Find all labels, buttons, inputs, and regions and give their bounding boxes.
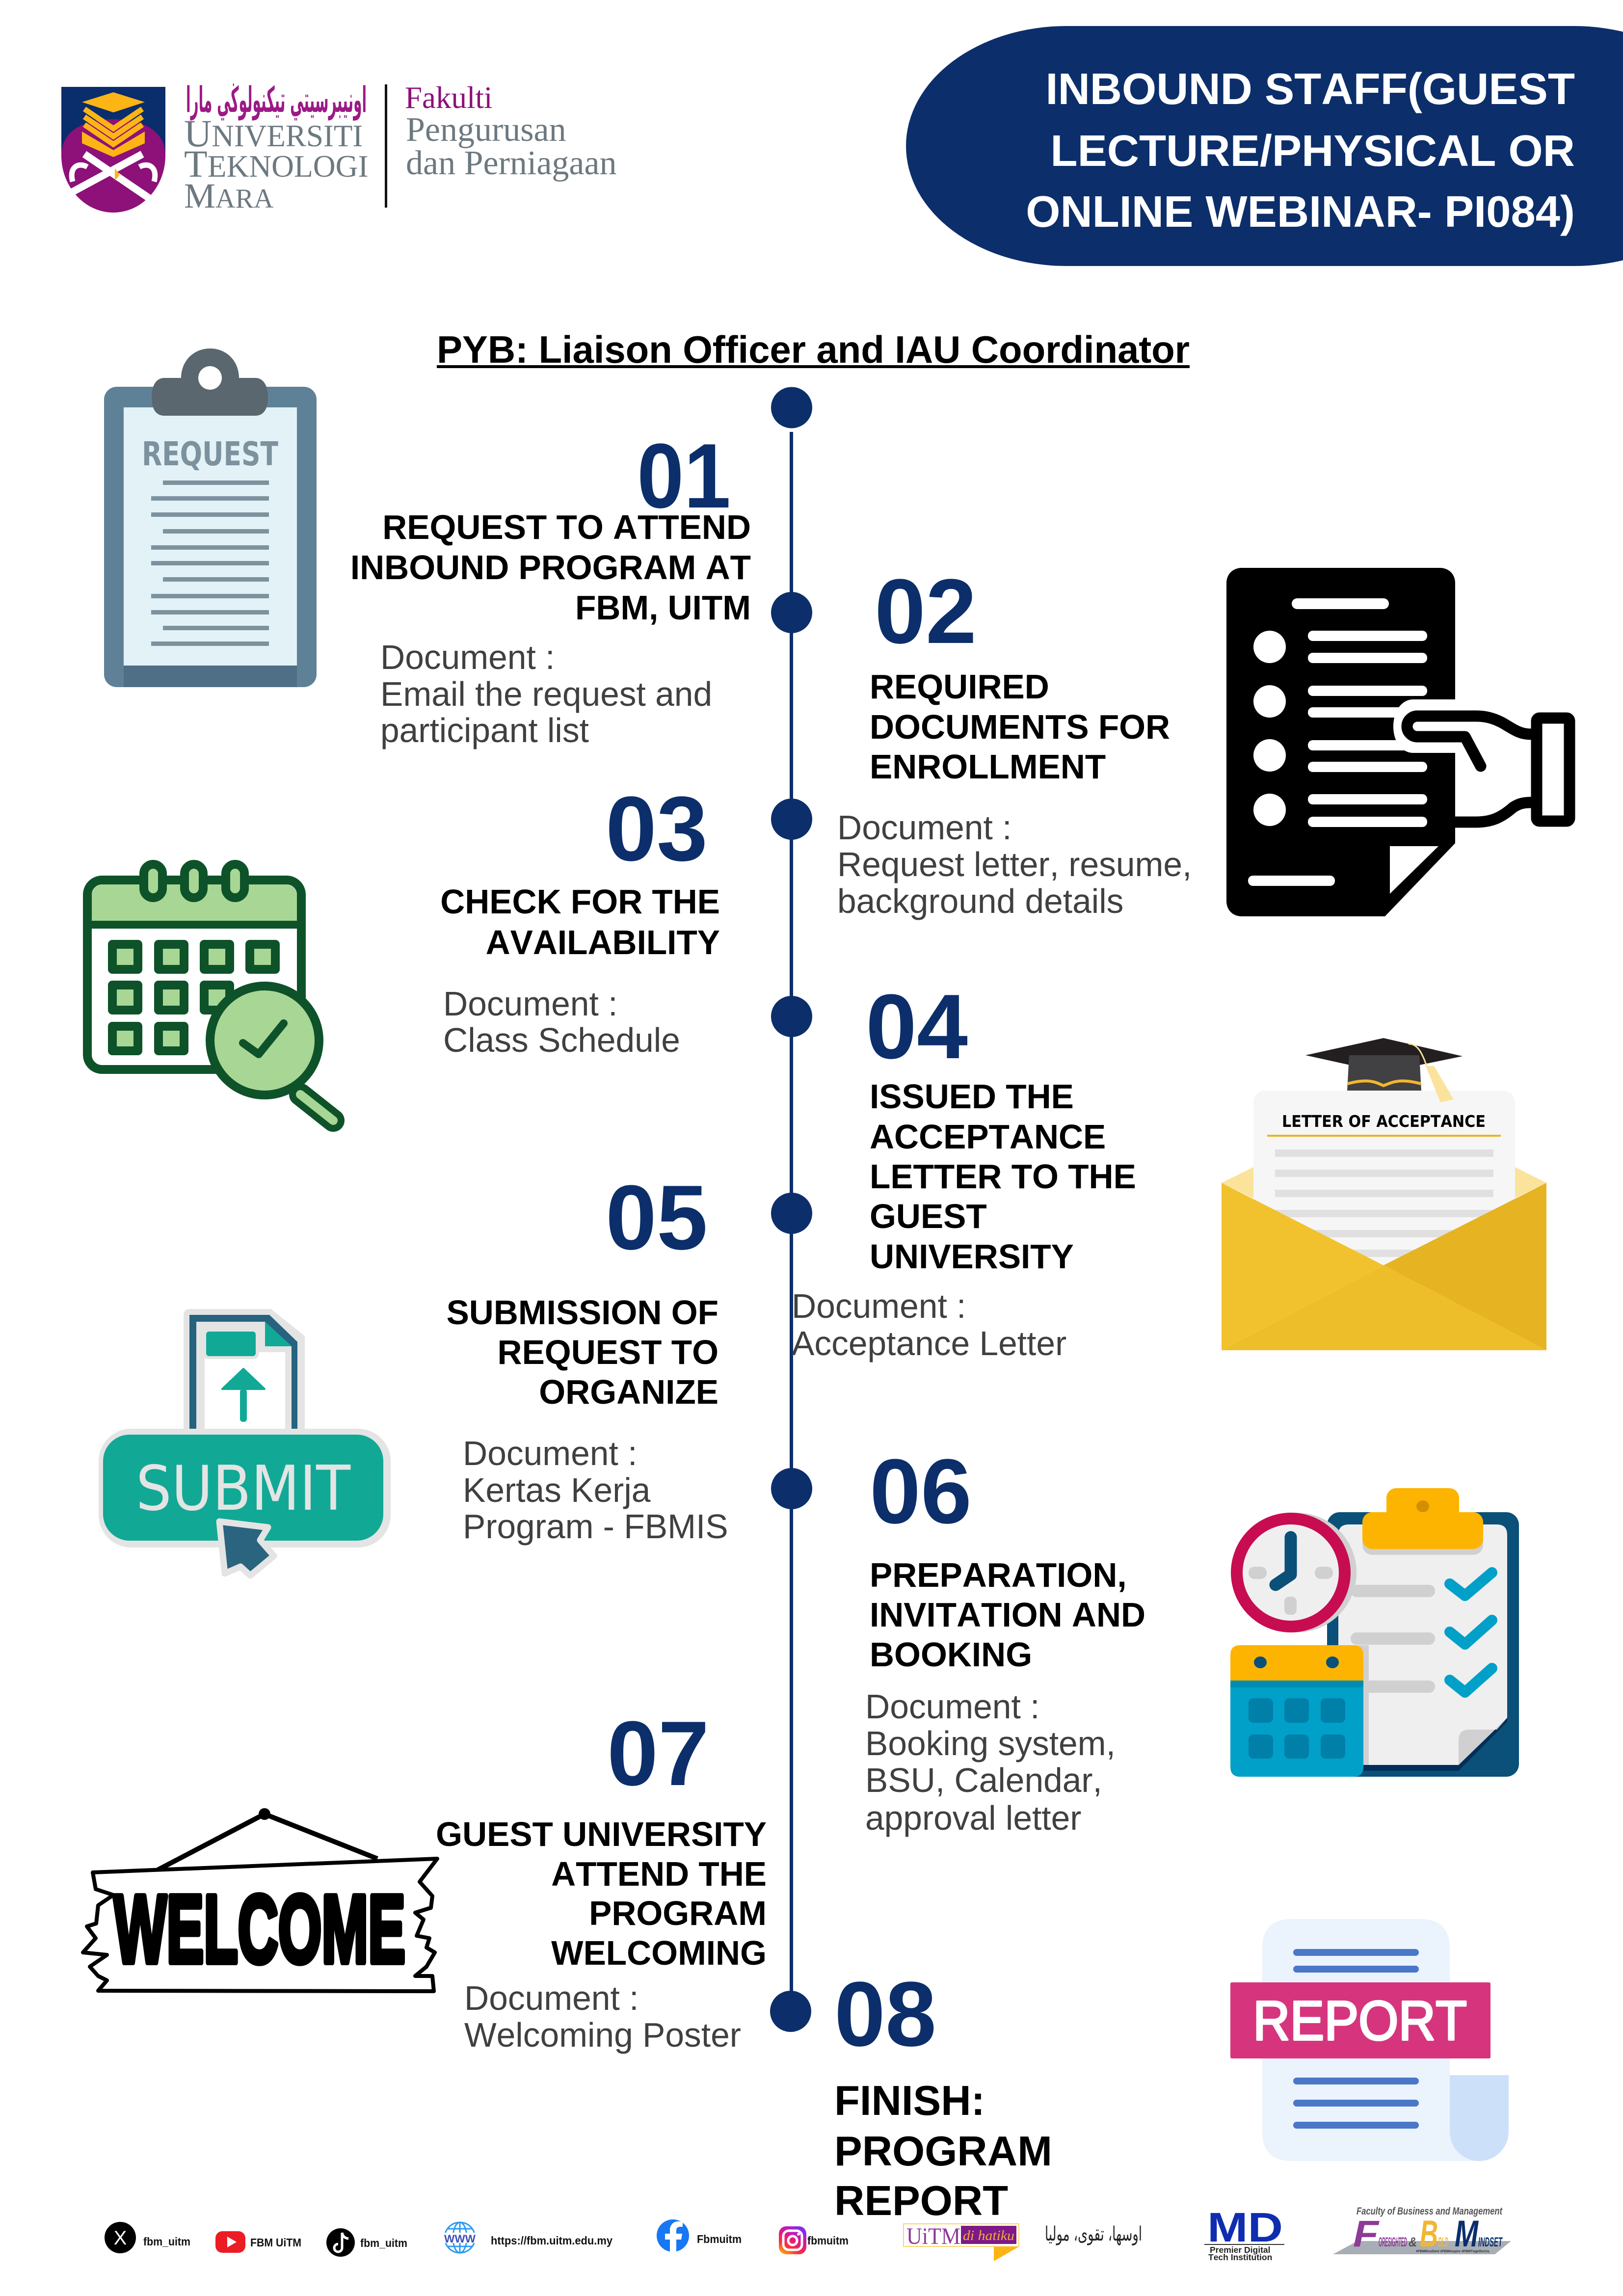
- footer: faculty tagline logo: #FBMResilient #FBMInspire #FBMTogetherUs: [1416, 2250, 1490, 2253]
- step 08 number: 08: [834, 1963, 936, 2065]
- footer: faculty tagline logo: OLD: [1438, 2235, 1448, 2249]
- logo university name: M: [184, 176, 215, 215]
- step 04 document: Acceptance Letter: [792, 1324, 1066, 1362]
- step 07 heading: ATTEND THE: [551, 1855, 767, 1893]
- icon: welcome sign: [83, 1808, 437, 1991]
- icon: checklist with clock and calendar: [1230, 1488, 1519, 1777]
- icon: request clipboard: REQUEST: [142, 435, 278, 473]
- step 01 heading: FBM, UITM: [575, 588, 751, 627]
- handle: Facebook: Fbmuitm: [697, 2233, 742, 2245]
- footer: faculty tagline logo: Faculty of Business and Management: [1357, 2206, 1503, 2217]
- step 07 document: Document :: [464, 1979, 639, 2017]
- step 01 heading: REQUEST TO ATTEND: [382, 508, 751, 546]
- step 07: [436, 1702, 767, 2054]
- step 07 heading: GUEST UNIVERSITY: [436, 1815, 767, 1853]
- step 05 document: Program - FBMIS: [463, 1507, 728, 1546]
- icon: website globe: [444, 2222, 476, 2253]
- step 02 heading: ENROLLMENT: [870, 748, 1106, 786]
- step 06: [865, 1440, 1145, 1837]
- step 05 document: Document :: [463, 1434, 637, 1472]
- step 06 heading: INVITATION AND: [870, 1596, 1145, 1634]
- step 03 heading: AVAILABILITY: [486, 923, 720, 961]
- footer: faculty tagline logo: [1333, 2206, 1511, 2255]
- graduation cap: [1305, 1038, 1463, 1091]
- step 07 heading: WELCOMING: [551, 1934, 767, 1972]
- step 08 heading: REPORT: [834, 2178, 1008, 2224]
- step 06 document: Document :: [865, 1687, 1039, 1726]
- footer: faculty tagline logo: M: [1455, 2213, 1479, 2255]
- footer: MD logo: Tech Institution: [1208, 2252, 1272, 2262]
- icon: Facebook: [657, 2219, 689, 2252]
- step 04 heading: LETTER TO THE: [870, 1157, 1136, 1196]
- step 03 heading: CHECK FOR THE: [440, 882, 720, 921]
- icon: welcome sign: WELCOME: [114, 1875, 405, 1983]
- title banner: [906, 26, 1623, 266]
- step 04 heading: UNIVERSITY: [870, 1237, 1074, 1276]
- footer: UiTM di hatiku badge: UiTM: [906, 2223, 960, 2249]
- step 03 document: Class Schedule: [443, 1021, 680, 1059]
- logo faculty name: Pengurusan: [406, 111, 566, 149]
- icon: report document: [1230, 1919, 1509, 2161]
- footer: UiTM di hatiku badge: di hatiku: [963, 2228, 1014, 2243]
- icon: report document: REPORT: [1253, 1990, 1467, 2052]
- step 05 document: Kertas Kerja: [463, 1471, 651, 1509]
- icon: TikTok: [326, 2228, 355, 2257]
- handle: YouTube: FBM UiTM: [250, 2236, 301, 2249]
- step 06 document: BSU, Calendar,: [865, 1761, 1102, 1799]
- footer: faculty tagline logo: INDSET: [1478, 2235, 1503, 2249]
- step 01 document: Email the request and: [380, 675, 712, 713]
- logo divider: [385, 84, 387, 208]
- logo university name: EKNOLOGI: [208, 149, 369, 184]
- step 04 number: 04: [866, 975, 968, 1078]
- step 03 document: Document :: [443, 985, 617, 1023]
- icon: X: [105, 2222, 136, 2253]
- step 03: [440, 777, 720, 1059]
- step 01: [350, 425, 751, 749]
- logo faculty name: Fakulti: [405, 80, 493, 115]
- title banner: ONLINE WEBINAR- PI084): [1026, 187, 1575, 237]
- icon: document with pointing hand: [1226, 568, 1570, 916]
- step 06 heading: PREPARATION,: [870, 1556, 1127, 1594]
- icon: UiTM shield: [61, 87, 165, 213]
- step 02 document: background details: [837, 882, 1123, 920]
- logo faculty name: dan Perniagaan: [406, 144, 617, 182]
- step 01 heading: INBOUND PROGRAM AT: [350, 548, 751, 587]
- handle: X: fbm_uitm: [143, 2235, 190, 2248]
- step 05 heading: SUBMISSION OF: [447, 1293, 718, 1332]
- step 02 heading: REQUIRED: [870, 667, 1049, 706]
- step 06 number: 06: [870, 1440, 972, 1543]
- icon: letter of acceptance envelope: [1222, 1038, 1546, 1350]
- icon: request clipboard: [104, 348, 317, 687]
- step 05: [447, 1166, 728, 1546]
- logo university name: U: [184, 112, 212, 155]
- icon: submit button: SUBMIT: [136, 1452, 351, 1524]
- small calendar: [1230, 1645, 1363, 1777]
- handle: Instagram: fbmuitm: [807, 2234, 849, 2247]
- title banner: INBOUND STAFF(GUEST: [1045, 64, 1575, 114]
- logo: UiTM faculty lockup: [61, 79, 617, 215]
- step 06 heading: BOOKING: [870, 1635, 1032, 1674]
- step 04 document: Document :: [792, 1287, 966, 1325]
- icon: letter of acceptance envelope: LETTER OF ACCEPTANCE: [1282, 1112, 1486, 1131]
- footer: social media: [105, 2219, 849, 2257]
- footer: MD logo: [1204, 2204, 1284, 2262]
- step 02 number: 02: [875, 560, 977, 663]
- step 08 heading: FINISH:: [834, 2078, 985, 2124]
- step 04 heading: GUEST: [870, 1197, 987, 1235]
- step 07 heading: PROGRAM: [589, 1894, 767, 1932]
- step 02: [837, 560, 1192, 920]
- step 08 heading: PROGRAM: [834, 2128, 1052, 2175]
- step 06 document: approval letter: [865, 1799, 1081, 1837]
- step 02 document: Request letter, resume,: [837, 845, 1192, 883]
- step 04 heading: ACCEPTANCE: [870, 1118, 1106, 1156]
- step 01 number: 01: [637, 425, 731, 527]
- step 03 number: 03: [606, 777, 708, 880]
- icon: calendar with magnifier: [87, 864, 333, 1121]
- subtitle: PYB: PYB: Liaison Officer and IAU Coordinator: [437, 328, 1190, 371]
- step 07 number: 07: [607, 1702, 709, 1805]
- step 05 number: 05: [606, 1166, 708, 1269]
- footer: faculty tagline logo: F: [1353, 2213, 1380, 2255]
- step 06 document: Booking system,: [865, 1724, 1116, 1762]
- icon: X: X: [114, 2227, 127, 2249]
- step 02 document: Document :: [837, 808, 1011, 847]
- footer: faculty tagline logo: B: [1420, 2213, 1438, 2255]
- step 02 heading: DOCUMENTS FOR: [870, 708, 1170, 746]
- footer: faculty tagline logo: ORESIGHTED: [1379, 2235, 1407, 2249]
- timeline: [770, 387, 812, 2032]
- website address: https://fbm.uitm.edu.my: [491, 2234, 612, 2247]
- logo university name: NIVERSITI: [212, 119, 363, 153]
- step 04 heading: ISSUED THE: [870, 1077, 1074, 1116]
- footer: MD logo: MD: [1207, 2204, 1283, 2250]
- icon: YouTube: [215, 2231, 245, 2253]
- handle: TikTok: fbm_uitm: [360, 2237, 407, 2249]
- step 08: [834, 1963, 1052, 2224]
- footer: UiTM di hatiku badge: [904, 2223, 1019, 2261]
- logo: UiTM faculty lockup: اونيبرسيتي تيكنولوڬي مارا: [186, 79, 367, 121]
- footer: jawi motto: اوسها، تقوى، موليا: [1045, 2223, 1142, 2245]
- icon: website globe: WWW: [444, 2233, 476, 2245]
- step 05 heading: ORGANIZE: [539, 1373, 718, 1411]
- title banner: LECTURE/PHYSICAL OR: [1050, 126, 1575, 176]
- step 07 document: Welcoming Poster: [464, 2016, 741, 2054]
- logo university name: ARA: [215, 184, 274, 214]
- step 04: [792, 975, 1136, 1362]
- icon: submit button: [99, 1309, 391, 1575]
- step 01 document: participant list: [380, 711, 589, 749]
- logo university name: T: [184, 142, 208, 185]
- footer: faculty tagline logo: &: [1409, 2235, 1417, 2249]
- step 05 heading: REQUEST TO: [498, 1333, 718, 1371]
- icon: Instagram: [779, 2226, 806, 2254]
- footer: MD logo: Premier Digital: [1210, 2245, 1271, 2255]
- clock: [1231, 1513, 1351, 1632]
- step 01 document: Document :: [380, 638, 555, 676]
